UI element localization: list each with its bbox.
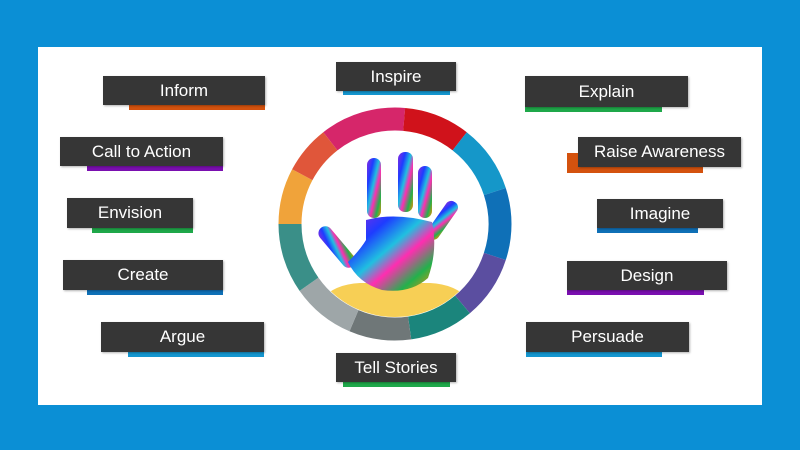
label: Argue (100, 322, 266, 357)
label: Call to Action: Call to Action (92, 142, 191, 160)
label: Create (62, 260, 226, 295)
label: Tell Stories: Tell Stories (354, 358, 438, 376)
label: Raise Awareness: Raise Awareness (594, 142, 725, 161)
label: Design (566, 260, 730, 295)
label: Inspire (336, 62, 458, 95)
panel: white background (38, 47, 762, 405)
label: Persuade: Persuade (571, 327, 644, 346)
yellow base (330, 283, 460, 317)
label: Create: Create (117, 265, 169, 284)
label: Inform: Inform (160, 80, 208, 100)
label: Inform (102, 76, 268, 110)
label: Call to Action (60, 136, 226, 171)
ring graphic with hand (278, 108, 512, 340)
label: Raise Awareness (567, 136, 744, 173)
label: Tell Stories (336, 352, 458, 387)
label: Design: Design (621, 266, 673, 284)
label: Imagine (596, 198, 726, 233)
label: Envision: Envision (98, 203, 162, 222)
label: Argue: Argue (160, 327, 205, 346)
label: Envision (66, 198, 196, 233)
label: Explain (524, 76, 690, 112)
icon: hand (316, 152, 460, 291)
label: Explain: Explain (579, 82, 634, 100)
label: Imagine: Imagine (630, 204, 690, 222)
label: Inspire: Inspire (370, 66, 422, 86)
label: Persuade (526, 322, 692, 357)
